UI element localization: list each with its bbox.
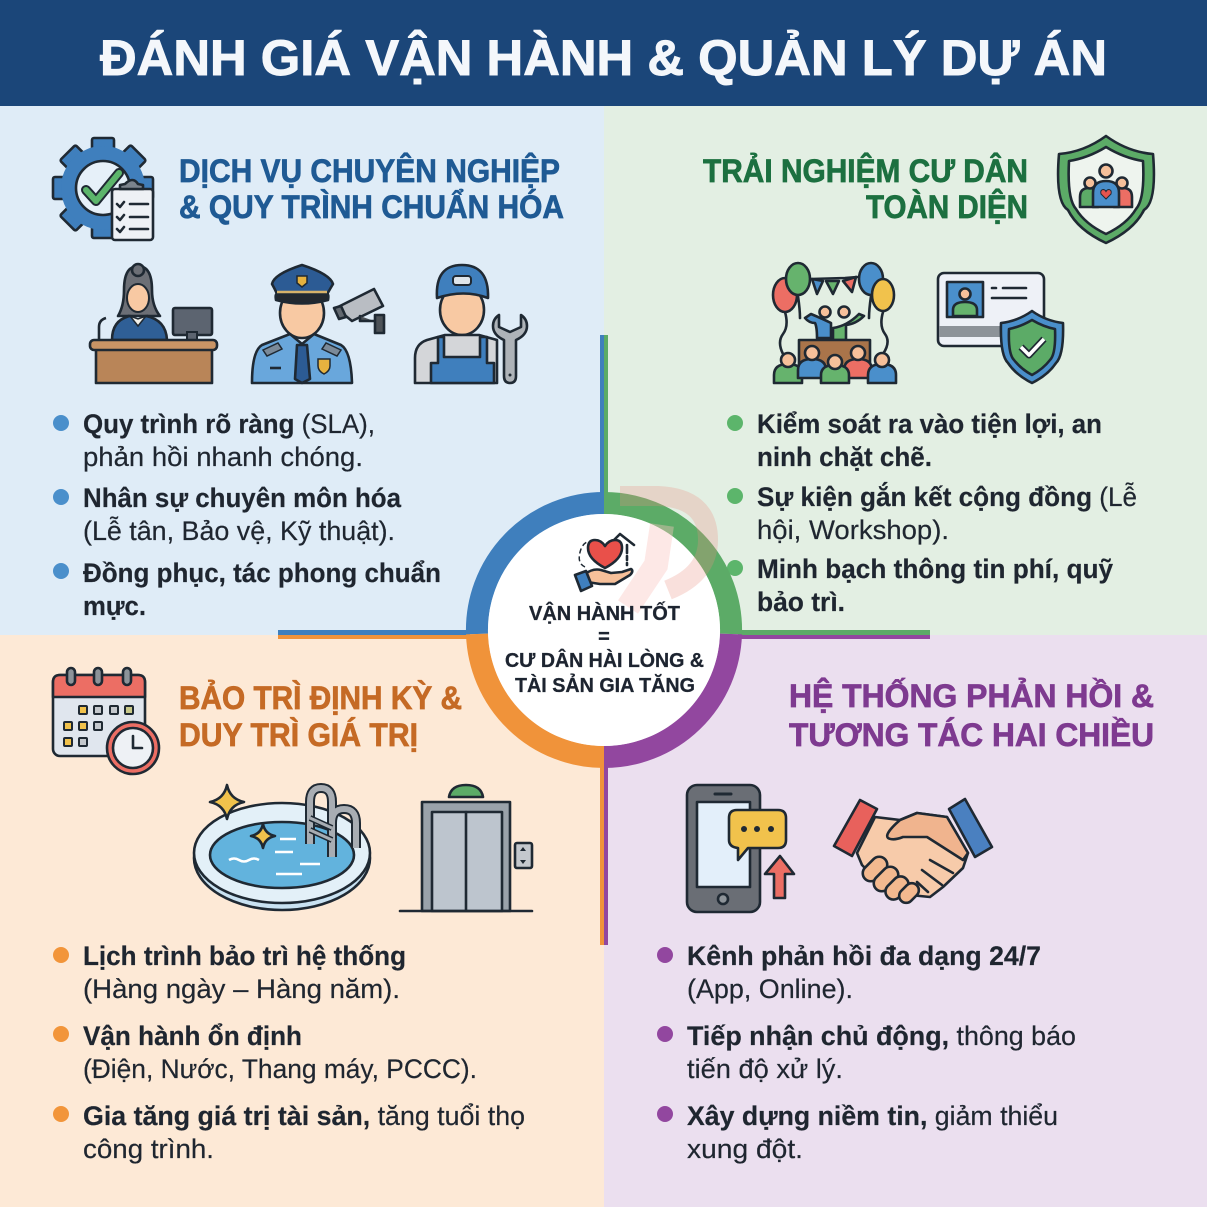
bullet list: service: Nhân sự chuyên môn hóa — [83, 483, 402, 513]
bullet list: feedback: Xây dựng niềm tin, giảm thiểu — [687, 1101, 1058, 1131]
center text: CƯ DÂN HÀI LÒNG & — [505, 648, 704, 672]
icon: ID card with security shield — [938, 273, 1063, 383]
center text: VẬN HÀNH TỐT — [529, 601, 680, 625]
icon: gear with checklist — [53, 138, 153, 240]
bullet list: feedback: (App, Online). — [687, 974, 853, 1004]
heading: feedback system: HỆ THỐNG PHẢN HỒI & — [789, 678, 1154, 714]
bullet list: resident experience: Minh bạch thông tin phí, quỹ — [757, 554, 1113, 584]
center text: TÀI SẢN GIA TĂNG — [515, 674, 695, 697]
bullet list: feedback — [657, 941, 1076, 1164]
heading: feedback system: TƯƠNG TÁC HAI CHIỀU — [789, 717, 1154, 753]
bullet list: maintenance: Gia tăng giá trị tài sản, tăng tuổi thọ — [83, 1101, 525, 1131]
center disc — [488, 514, 720, 746]
heading: resident experience: TOÀN DIỆN — [866, 189, 1028, 225]
icon: hand holding heart and home — [575, 534, 634, 591]
bullet list: resident experience: Sự kiện gắn kết cộng đồng (Lễ — [757, 481, 1137, 512]
heading: periodic maintenance: DUY TRÌ GIÁ TRỊ — [179, 717, 418, 753]
heading: professional service — [179, 153, 564, 225]
bullet list: service: Đồng phục, tác phong chuẩn — [83, 558, 441, 588]
panel: periodic maintenance — [0, 635, 604, 1207]
bullet list: resident experience: ninh chặt chẽ. — [757, 442, 932, 472]
icon: receptionist at desk — [90, 264, 217, 383]
panel: comprehensive resident experience — [604, 106, 1207, 635]
heading: periodic maintenance: BẢO TRÌ ĐỊNH KỲ & — [179, 680, 462, 716]
heading: professional service: & QUY TRÌNH CHUẨN HÓA — [179, 189, 564, 225]
bullet list: feedback: tiến độ xử lý. — [687, 1054, 843, 1084]
bullet list: service: Quy trình rõ ràng (SLA), — [83, 409, 375, 439]
icon: elevator — [400, 785, 532, 911]
bullet list: maintenance: Lịch trình bảo trì hệ thống — [83, 941, 406, 971]
bullet list: maintenance: Vận hành ổn định — [83, 1021, 302, 1051]
center text: = — [598, 626, 610, 648]
panel: professional service and standard process — [0, 106, 604, 635]
title banner — [0, 0, 1207, 106]
heading: resident experience — [703, 153, 1028, 225]
bullet list: feedback: Tiếp nhận chủ động, thông báo — [687, 1021, 1076, 1051]
heading: resident experience: TRẢI NGHIỆM CƯ DÂN — [703, 153, 1028, 189]
bullet list: maintenance: (Điện, Nước, Thang máy, PCCC). — [83, 1054, 477, 1084]
bullet list: maintenance: công trình. — [83, 1134, 214, 1164]
icon: phone with message and arrow — [687, 785, 794, 912]
icon: security guard with camera — [252, 265, 384, 383]
icon: calendar with clock — [53, 668, 159, 774]
bullet list: maintenance — [53, 941, 525, 1164]
cross divider lines — [278, 335, 930, 945]
icon: community party with balloons — [773, 263, 896, 383]
icon: handshake — [834, 799, 992, 906]
heading: professional service: DỊCH VỤ CHUYÊN NGHIỆP — [179, 153, 560, 189]
icon: maintenance technician with wrench — [415, 265, 527, 383]
bullet list: service — [53, 409, 441, 621]
icon: swimming pool with ladder — [194, 785, 370, 910]
bullet list: service: (Lễ tân, Bảo vệ, Kỹ thuật). — [83, 515, 395, 546]
center ring and message — [477, 496, 731, 757]
ring: four coloured arcs — [477, 503, 731, 757]
bullet list: resident experience: Kiểm soát ra vào tiện lợi, an — [757, 409, 1102, 439]
bullet list: maintenance: (Hàng ngày – Hàng năm). — [83, 974, 400, 1004]
bullet list: service: mực. — [83, 591, 146, 621]
title banner: ĐÁNH GIÁ VẬN HÀNH & QUẢN LÝ DỰ ÁN — [100, 30, 1107, 86]
panel: two-way feedback system — [604, 635, 1207, 1207]
faint watermark logo — [620, 496, 708, 607]
heading: periodic maintenance — [179, 680, 462, 753]
bullet list: resident experience — [727, 409, 1137, 617]
center text — [505, 601, 704, 697]
heading: feedback system — [789, 678, 1154, 753]
bullet list: resident experience: hội, Workshop). — [757, 515, 949, 545]
bullet list: feedback: Kênh phản hồi đa dạng 24/7 — [687, 941, 1041, 971]
bullet list: resident experience: bảo trì. — [757, 587, 845, 617]
bullet list: feedback: xung đột. — [687, 1134, 803, 1164]
icon: shield with residents — [1058, 136, 1154, 243]
bullet list: service: phản hồi nhanh chóng. — [83, 442, 363, 472]
